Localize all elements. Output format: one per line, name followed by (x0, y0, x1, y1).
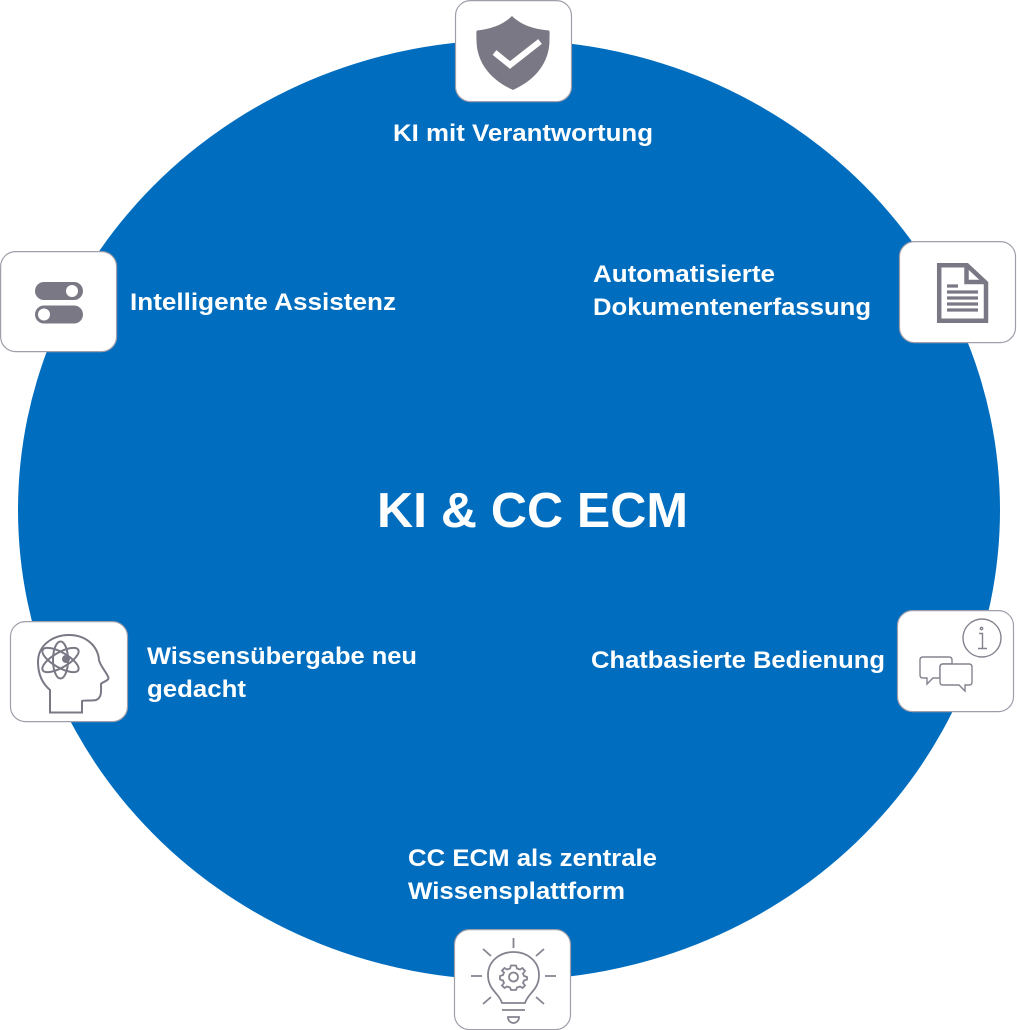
label: KI mit Verantwortung (393, 120, 653, 147)
label: Automatisierte (593, 261, 775, 288)
panel: CC ECM als zentrale Wissensplattform (408, 845, 657, 1030)
icon: shield with check (476, 16, 550, 90)
card: head (10, 622, 128, 722)
label: Intelligente Assistenz (130, 289, 396, 316)
card: chat (898, 611, 1014, 712)
icon: toggle switches (35, 282, 83, 324)
label: CC ECM als zentrale (408, 845, 657, 872)
card: document (900, 242, 1016, 343)
panel: Chatbasierte Bedienung (591, 611, 1014, 712)
panel: Intelligente Assistenz (1, 252, 396, 352)
icon: head with atom (38, 635, 108, 712)
label: Chatbasierte Bedienung (591, 647, 885, 674)
icon: chat bubbles with info (920, 619, 1001, 691)
panel: Wissensübergabe neu gedacht (10, 622, 417, 722)
label: Wissensübergabe neu (147, 643, 417, 670)
panel: Automatisierte Dokumentenerfassung (593, 242, 1016, 343)
title: KI & CC ECM (377, 484, 688, 538)
icon: document (939, 265, 986, 321)
card: bulb (454, 930, 570, 1030)
label line 2: Wissensplattform (408, 878, 625, 905)
label line 2: Dokumentenerfassung (593, 294, 871, 321)
card: toggles (1, 252, 117, 352)
icon: light bulb with gear (471, 938, 556, 1023)
card: shield (456, 1, 572, 102)
panel: KI mit Verantwortung (393, 1, 653, 147)
label line 2: gedacht (147, 676, 246, 703)
